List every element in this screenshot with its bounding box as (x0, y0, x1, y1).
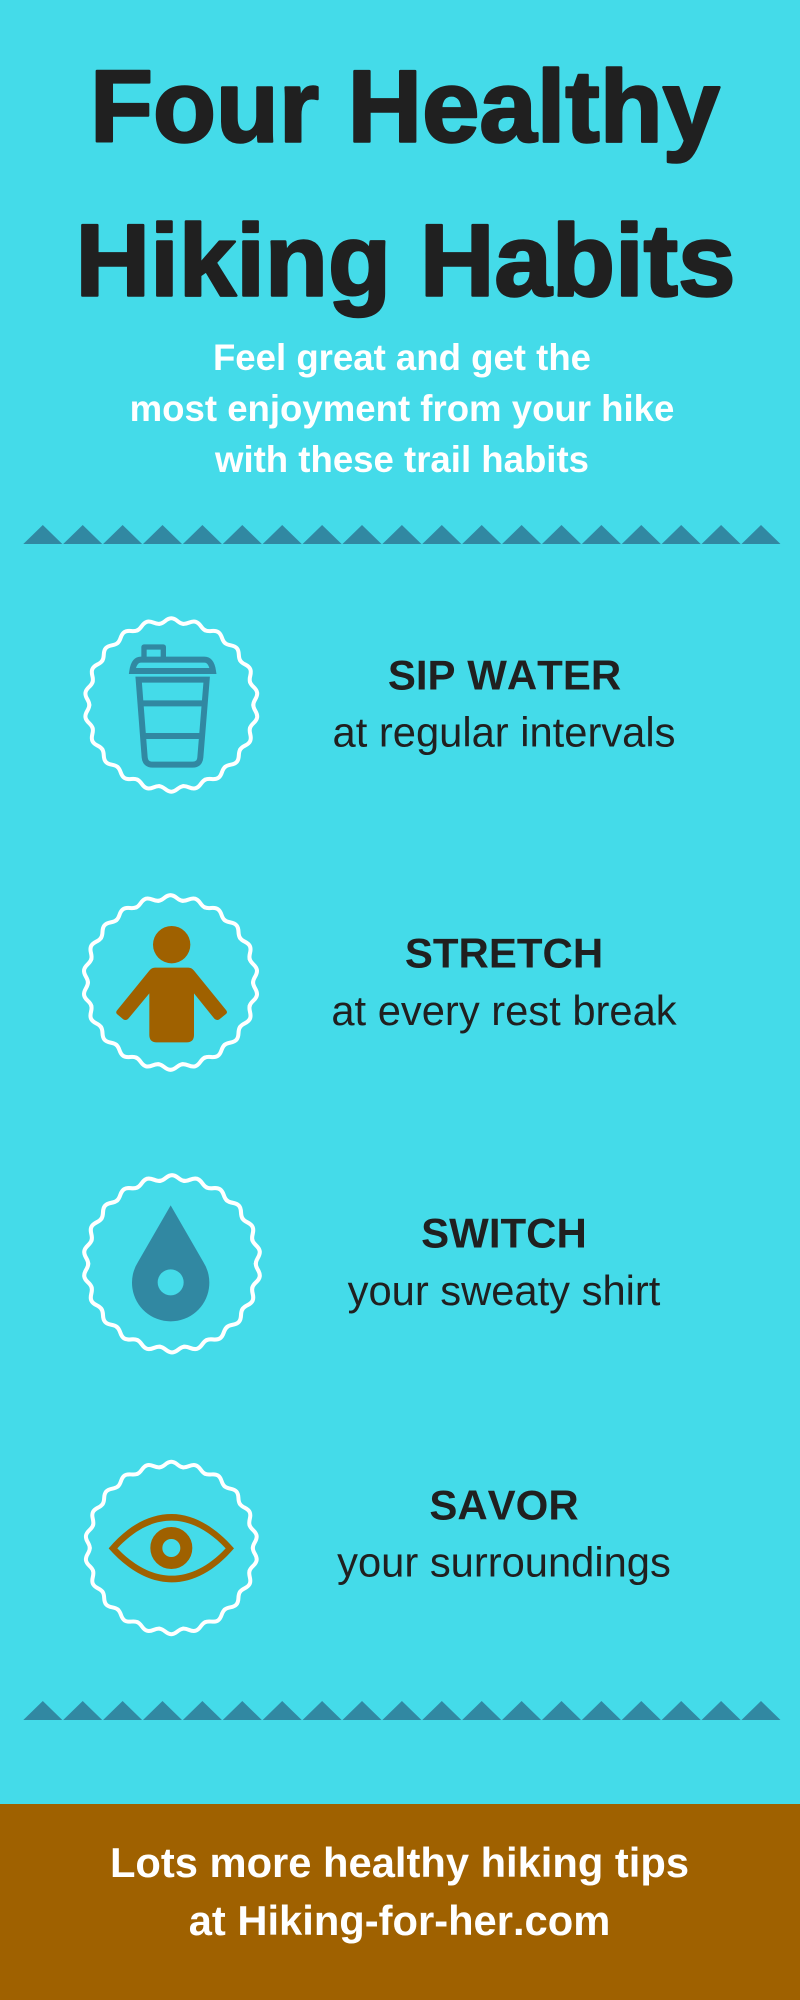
text: savor: your surroundings (337, 1538, 671, 1586)
icon: eye (109, 1514, 234, 1582)
footer text (110, 1839, 689, 1944)
icon: badge outline (84, 1462, 258, 1634)
footer text: Lots more healthy hiking tips (110, 1839, 689, 1886)
subtitle: most enjoyment from your hike (130, 388, 674, 429)
text: stretch: at every rest break (331, 987, 677, 1034)
icon: badge outline (84, 618, 259, 792)
text: stretch (331, 930, 677, 1034)
icon: water drop (132, 1205, 209, 1321)
footer text: at Hiking-for-her.com (189, 1897, 610, 1944)
text: switch: SWITCH (421, 1210, 587, 1256)
text: sip water: SIP WATER (388, 652, 621, 698)
panel: savor (84, 1462, 671, 1634)
subtitle: Feel great and get the (213, 337, 591, 378)
text: savor (337, 1482, 671, 1586)
bottom triangle border (23, 1701, 781, 1720)
text: switch: your sweaty shirt (348, 1267, 661, 1314)
text: switch (348, 1210, 661, 1314)
text: sip water (333, 652, 675, 756)
icon: person (116, 926, 227, 1042)
title: Four Healthy (90, 50, 720, 164)
top triangle border (23, 525, 781, 544)
text: savor: SAVOR (429, 1482, 579, 1528)
text: sip water: at regular intervals (333, 708, 675, 756)
subtitle (130, 337, 674, 480)
panel: switch (83, 1175, 661, 1352)
icon: badge outline (83, 1175, 261, 1352)
title: Hiking Habits (76, 204, 736, 318)
text: stretch: STRETCH (405, 930, 603, 976)
panel: stretch (82, 895, 677, 1070)
icon: badge outline (82, 895, 259, 1070)
icon: cup (132, 647, 213, 765)
footer band (0, 1804, 800, 2000)
subtitle: with these trail habits (214, 439, 589, 480)
panel: sip water (84, 618, 675, 792)
title (76, 50, 736, 318)
